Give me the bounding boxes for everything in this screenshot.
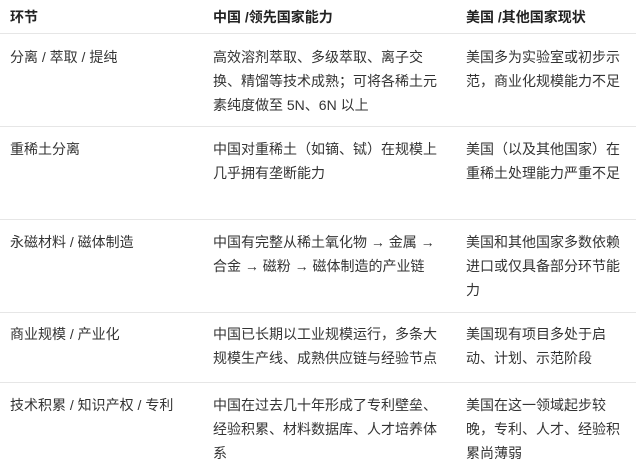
- text: 美国现有项目多处于启动、计划、示范阶段: [466, 326, 606, 366]
- row 4: 商业规模 / 产业化: [10, 326, 120, 342]
- text: 中国对重稀土（如镝、铽）在规模上几乎拥有垄断能力: [213, 141, 437, 181]
- row 1: 分离 / 萃取 / 提纯: [10, 49, 117, 65]
- text: 中国在过去几十年形成了专利壁垒、经验积累、材料数据库、人才培养体系: [213, 397, 437, 461]
- text: 美国多为实验室或初步示范，商业化规模能力不足: [466, 49, 620, 89]
- text: 中国有完整从稀土氧化物 → 金属 → 合金 → 磁粉 → 磁体制造的产业链: [213, 234, 435, 274]
- row 5: 技术积累 / 知识产权 / 专利: [10, 397, 173, 413]
- text: 中国已长期以工业规模运行，多条大规模生产线、成熟供应链与经验节点: [213, 326, 437, 366]
- text: 美国和其他国家多数依赖进口或仅具备部分环节能力: [466, 234, 620, 298]
- row 2: 重稀土分离: [10, 141, 80, 157]
- text: 美国（以及其他国家）在重稀土处理能力严重不足: [466, 141, 620, 181]
- row 3: 永磁材料 / 磁体制造: [10, 234, 134, 250]
- text: 美国 /其他国家现状: [466, 9, 586, 25]
- header row: 环节: [10, 9, 38, 25]
- text: 美国在这一领域起步较晚，专利、人才、经验积累尚薄弱: [466, 397, 620, 461]
- text: 中国 /领先国家能力: [213, 9, 333, 25]
- text: 高效溶剂萃取、多级萃取、离子交换、精馏等技术成熟；可将各稀土元素纯度做至 5N、6N 以上: [213, 49, 437, 113]
